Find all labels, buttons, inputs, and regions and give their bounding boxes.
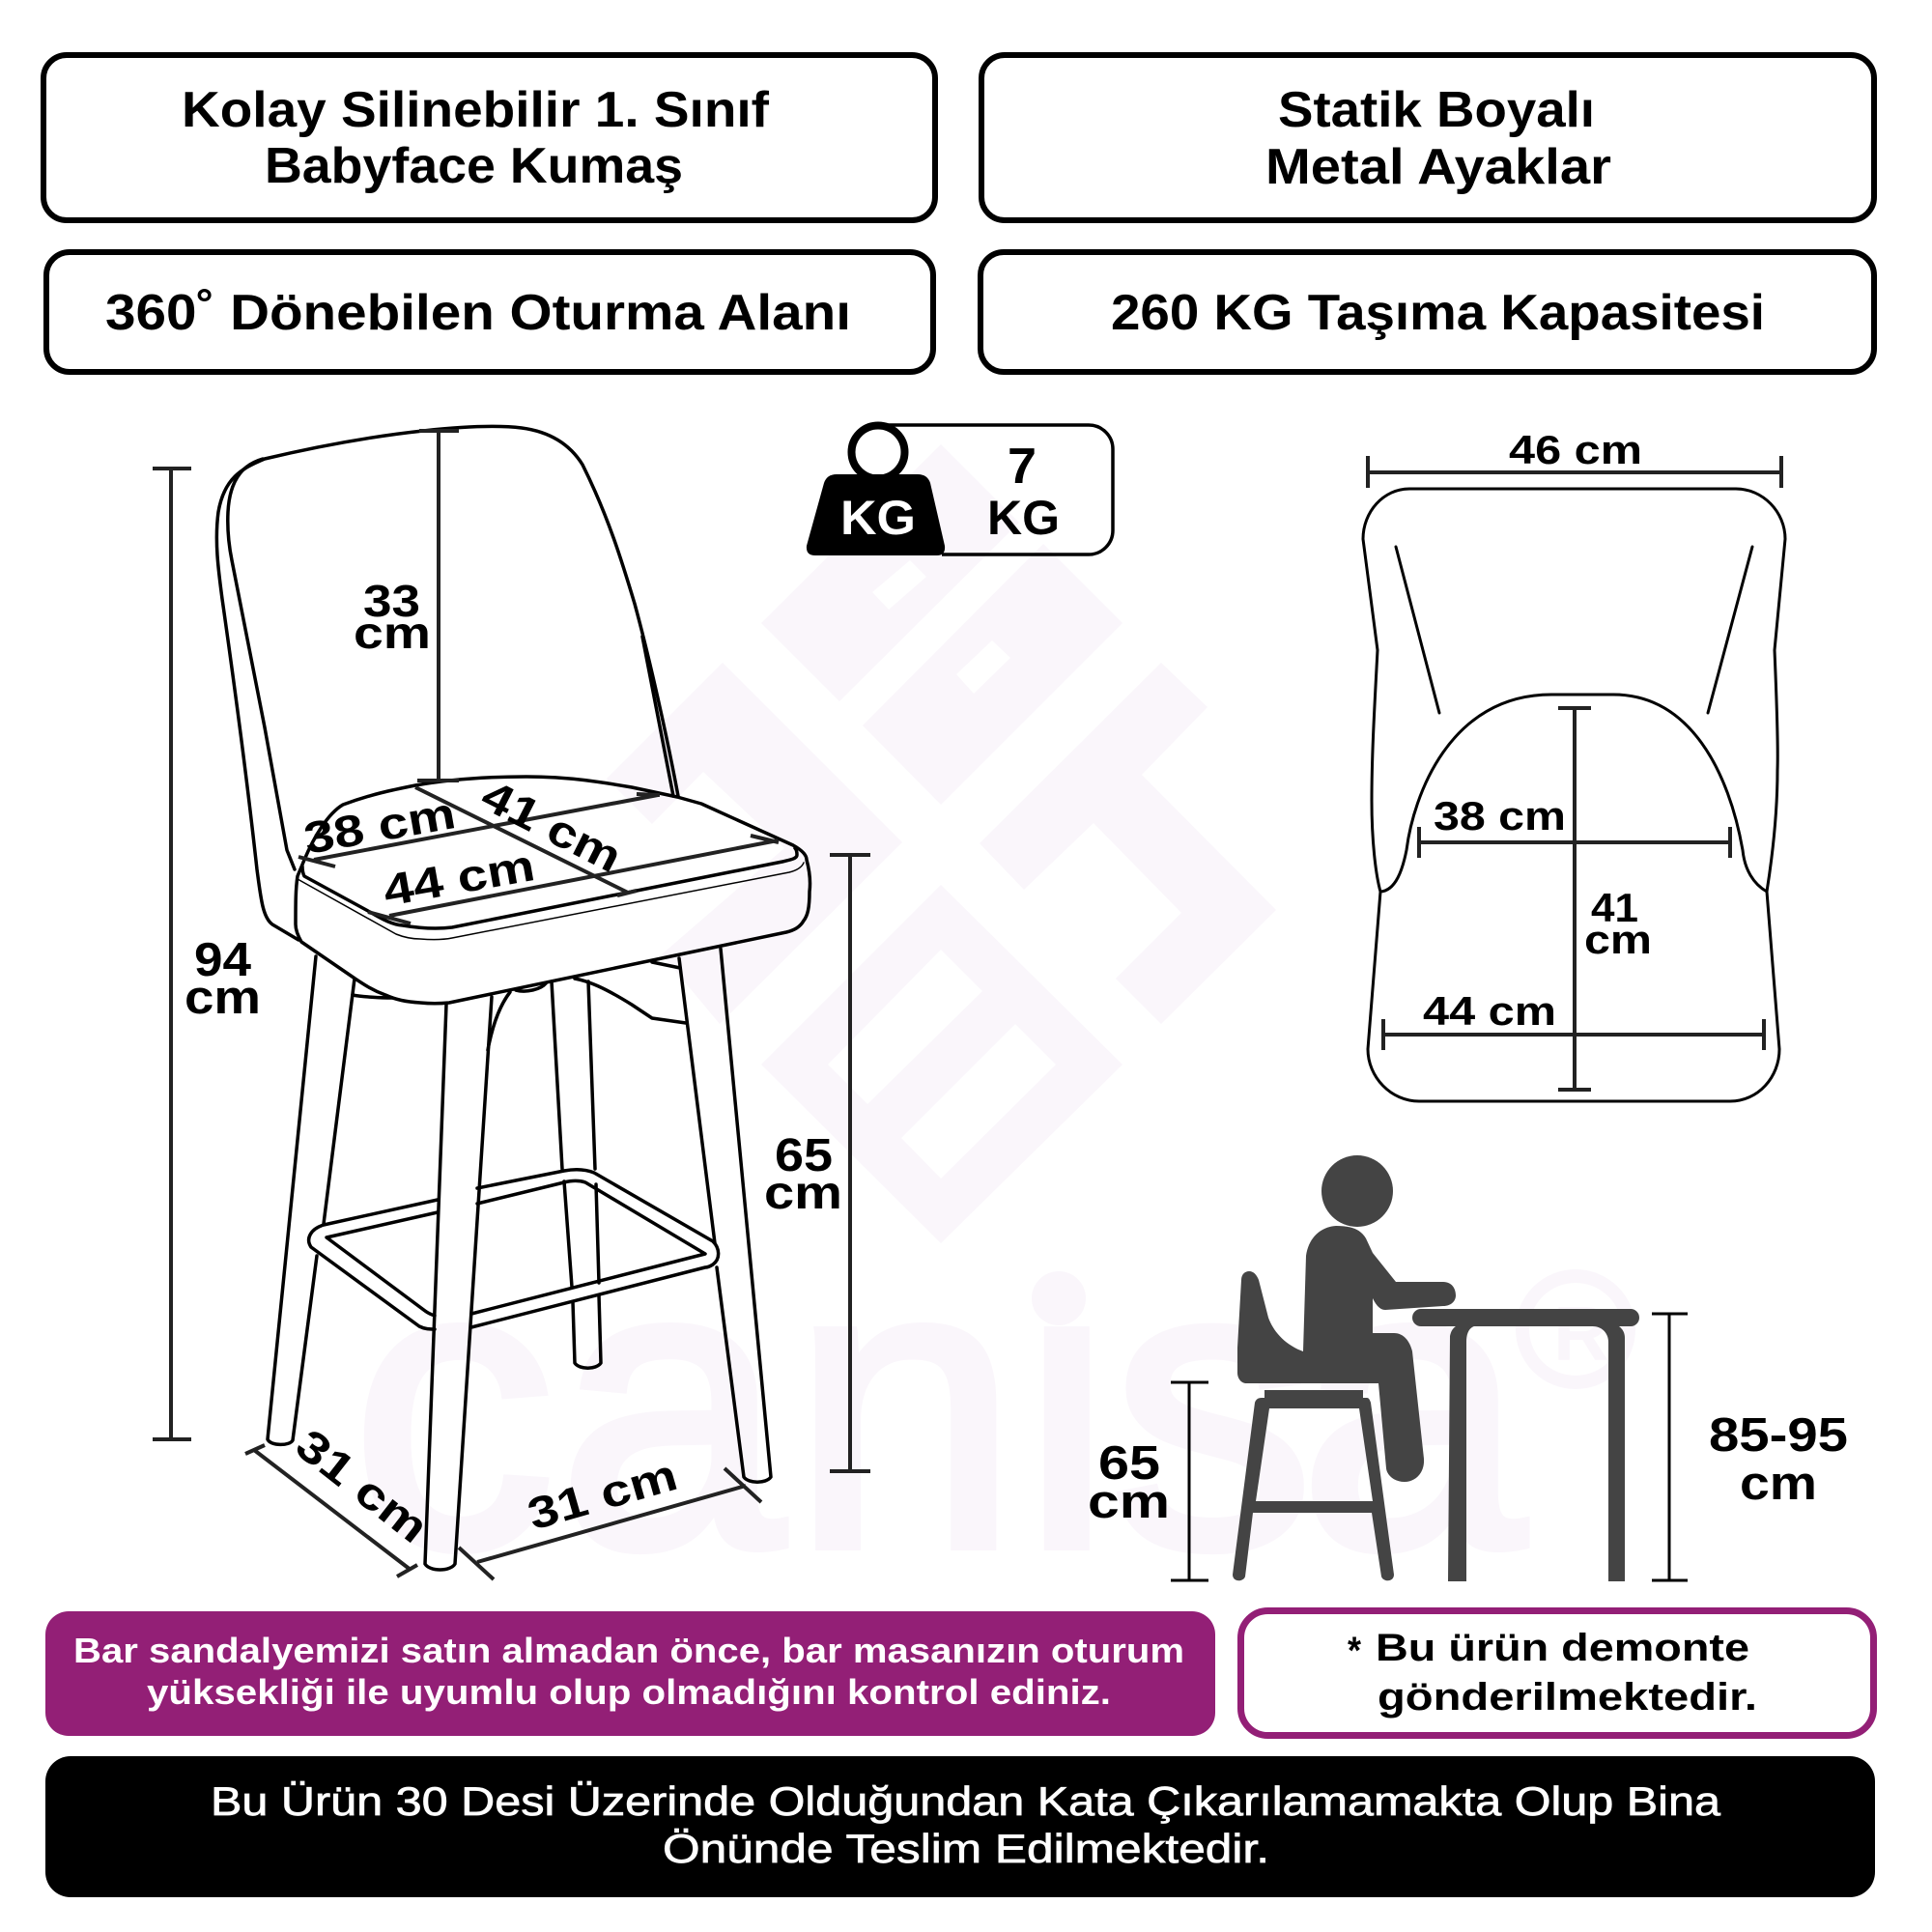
- icon: person body on chair: [1237, 1226, 1456, 1482]
- dimension: stool height 65 cm: cm: [1088, 1476, 1170, 1528]
- outlined note: disassembled shipping: Bu ürün demonte: [1376, 1627, 1749, 1669]
- dimension: stool height 65 cm: [1088, 1382, 1208, 1580]
- feature box: metal legs: Metal Ayaklar: [1265, 139, 1611, 195]
- top view outline: [1363, 489, 1785, 1101]
- width 44 cm: [1383, 988, 1764, 1050]
- footrest ring: [309, 1170, 719, 1329]
- width 38 cm: [1419, 793, 1730, 858]
- seated person at bar table: [1233, 1155, 1639, 1581]
- watermark: brand logo and wordmark: n: [792, 1179, 1018, 1633]
- feature box: fabric: Babyface Kumaş: [265, 138, 683, 194]
- width 44 cm: 44 cm: [1423, 988, 1556, 1034]
- watermark: brand logo and wordmark: c: [352, 1179, 554, 1633]
- dimension: table height 85-95 cm: cm: [1740, 1458, 1817, 1510]
- seat cushion: [296, 777, 810, 1004]
- icon: kettlebell weight: [807, 425, 945, 555]
- dimension: seat on chair: [298, 770, 779, 923]
- width 38 cm: 38 cm: [1434, 793, 1566, 838]
- outlined note: disassembled shipping: *: [1348, 1630, 1361, 1672]
- watermark: brand logo and wordmark: s: [1111, 1179, 1314, 1633]
- icon: bar table: [1412, 1309, 1639, 1581]
- watermark: brand logo and wordmark: a: [558, 1179, 786, 1633]
- dimension: table height 85-95 cm: [1652, 1314, 1848, 1580]
- dimension: leg span 31 cm right: [459, 1449, 761, 1579]
- purple notice: Bar sandalyemizi satın almadan önce, bar masanızın oturum: [73, 1631, 1184, 1670]
- dimension: table height 85-95 cm: 85-95: [1709, 1409, 1848, 1462]
- feature box: fabric: Kolay Silinebilir 1. Sınıf: [182, 82, 770, 138]
- width 46 cm: [1368, 427, 1781, 488]
- chair side view line drawing: [216, 427, 810, 1570]
- feature box: fabric: [43, 55, 935, 220]
- black delivery notice: Bu Ürün 30 Desi Üzerinde Olduğundan Kata Çıkarılamamakta Olup Bina: [211, 1778, 1721, 1824]
- dimension: seat on chair: 41 cm: [473, 770, 630, 882]
- dimension: leg span 31 cm left: 31 cm: [287, 1419, 438, 1552]
- dimension: total height 94 cm: 94: [194, 934, 251, 986]
- outlined note: disassembled shipping: gönderilmektedir.: [1378, 1676, 1757, 1719]
- weight value: 7: [1008, 439, 1037, 495]
- weight value: [987, 439, 1060, 545]
- icon: head: [1321, 1155, 1393, 1227]
- purple notice: yüksekliği ile uyumlu olup olmadığını kontrol ediniz.: [147, 1672, 1111, 1712]
- legs: [268, 949, 771, 1570]
- dimension: seat height 65 cm: cm: [764, 1168, 842, 1219]
- dimension: stool height 65 cm: 65: [1098, 1437, 1160, 1490]
- dimension: backrest 33 cm: cm: [354, 608, 431, 658]
- dimension: total height 94 cm: cm: [185, 972, 261, 1024]
- icon: bar stool: [1233, 1390, 1394, 1580]
- weight value: KG: [987, 491, 1060, 545]
- black delivery notice: Önünde Teslim Edilmektedir.: [663, 1826, 1269, 1871]
- watermark: brand logo and wordmark: R: [1553, 1291, 1609, 1377]
- badge outline: [881, 425, 1113, 554]
- width 46 cm: 46 cm: [1509, 427, 1642, 472]
- dimension: backrest 33 cm: 33: [363, 576, 420, 626]
- icon: kettlebell weight: KG: [840, 491, 916, 545]
- feature box: swivel seat: [46, 252, 933, 372]
- feature box: metal legs: [981, 55, 1874, 220]
- under-seat details: [353, 962, 686, 1050]
- chair top view: [1363, 427, 1785, 1101]
- dimension: leg span 31 cm left: [245, 1419, 438, 1577]
- black delivery notice: [45, 1756, 1875, 1897]
- dimension: backrest 33 cm: [354, 431, 459, 781]
- dimension: seat on chair: 38 cm: [300, 787, 459, 864]
- dimension: seat on chair: 44 cm: [380, 839, 538, 916]
- watermark: brand logo and wordmark: [352, 444, 1629, 1633]
- depth 41 cm: [1558, 706, 1652, 1090]
- watermark: brand logo and wordmark: a: [1299, 1179, 1527, 1633]
- purple notice: [45, 1611, 1215, 1736]
- depth 41 cm: cm: [1584, 917, 1652, 962]
- dimension: leg span 31 cm right: 31 cm: [522, 1449, 683, 1540]
- feature box: load capacity: [980, 252, 1874, 372]
- feature box: metal legs: Statik Boyalı: [1278, 82, 1595, 138]
- dimension: total height 94 cm: [153, 469, 261, 1439]
- watermark: brand logo and wordmark: ı: [1010, 1179, 1123, 1633]
- backrest: [216, 427, 678, 940]
- outlined note: disassembled shipping: [1240, 1611, 1874, 1735]
- feature box: load capacity: 260 KG Taşıma Kapasitesi: [1111, 285, 1765, 341]
- dimension: seat height 65 cm: 65: [775, 1130, 833, 1181]
- feature box: swivel seat: 360˚ Dönebilen Oturma Alanı: [105, 285, 851, 341]
- depth 41 cm: 41: [1591, 885, 1638, 930]
- dimension: seat height 65 cm: [764, 855, 870, 1471]
- weight badge: [807, 425, 1113, 555]
